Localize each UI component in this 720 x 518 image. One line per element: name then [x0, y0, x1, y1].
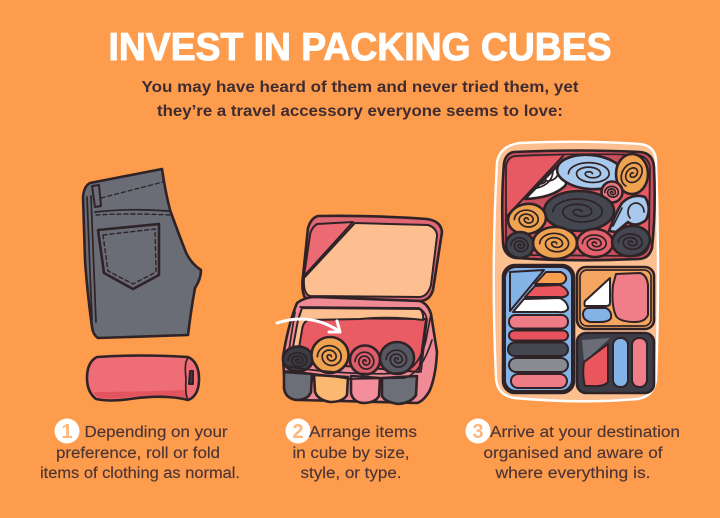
illustration: open packing cube: [277, 216, 442, 404]
dark roll bottom right: [610, 223, 652, 259]
illustration: rolled clothing: [87, 356, 199, 400]
number badge 3: 3: [472, 421, 484, 443]
step 2 caption: Arrange items: [309, 424, 417, 441]
blue scarf roll: [609, 196, 649, 232]
cube base: [277, 297, 437, 404]
number badge 3: [466, 418, 490, 444]
upper right compartment: [577, 267, 654, 329]
step 3 caption: Arrive at your destination: [490, 424, 680, 441]
number badge 1: [54, 418, 80, 444]
step 1 caption: Depending on your: [84, 424, 228, 441]
white arrow: [277, 319, 340, 332]
step 1 caption: preference, roll or fold: [56, 445, 220, 462]
blue roll: [556, 152, 624, 192]
intro text: You may have heard of them and never tried them, yet: [142, 79, 578, 96]
white roll: [525, 160, 568, 199]
suitcase white outline: [494, 142, 658, 401]
lower right compartment: [577, 333, 654, 393]
step 3 caption: where everything is.: [494, 465, 650, 482]
left compartment: [503, 265, 574, 393]
jeans pocket: [98, 224, 159, 289]
intro text: [142, 79, 578, 120]
pink roll bottom: [577, 229, 613, 257]
number badge 2: 2: [292, 421, 304, 443]
cube lid: [302, 216, 442, 301]
top compartment: [502, 150, 655, 260]
step 1 caption: [40, 418, 240, 482]
step 2 caption: style, or type.: [300, 465, 402, 482]
title: INVEST IN PACKING CUBES: [108, 26, 612, 69]
illustration: folded jeans: [83, 169, 201, 338]
orange roll: [616, 154, 648, 194]
step 2 caption: [286, 418, 417, 482]
large black roll: [544, 191, 614, 231]
dark roll bottom left: [506, 232, 534, 258]
step 2 caption: in cube by size,: [292, 445, 410, 462]
step 1 caption: items of clothing as normal.: [40, 465, 240, 482]
number badge 1: 1: [61, 421, 73, 443]
rolls in cube: [283, 337, 417, 404]
step 3 caption: organised and aware of: [484, 445, 663, 462]
orange roll left: [506, 201, 548, 237]
intro text: they’re a travel accessory everyone seems to love:: [157, 103, 563, 120]
orange roll bottom: [533, 227, 577, 259]
illustration: packed suitcase: [494, 142, 658, 401]
step 3 caption: [466, 418, 680, 482]
small pink roll: [602, 182, 622, 202]
